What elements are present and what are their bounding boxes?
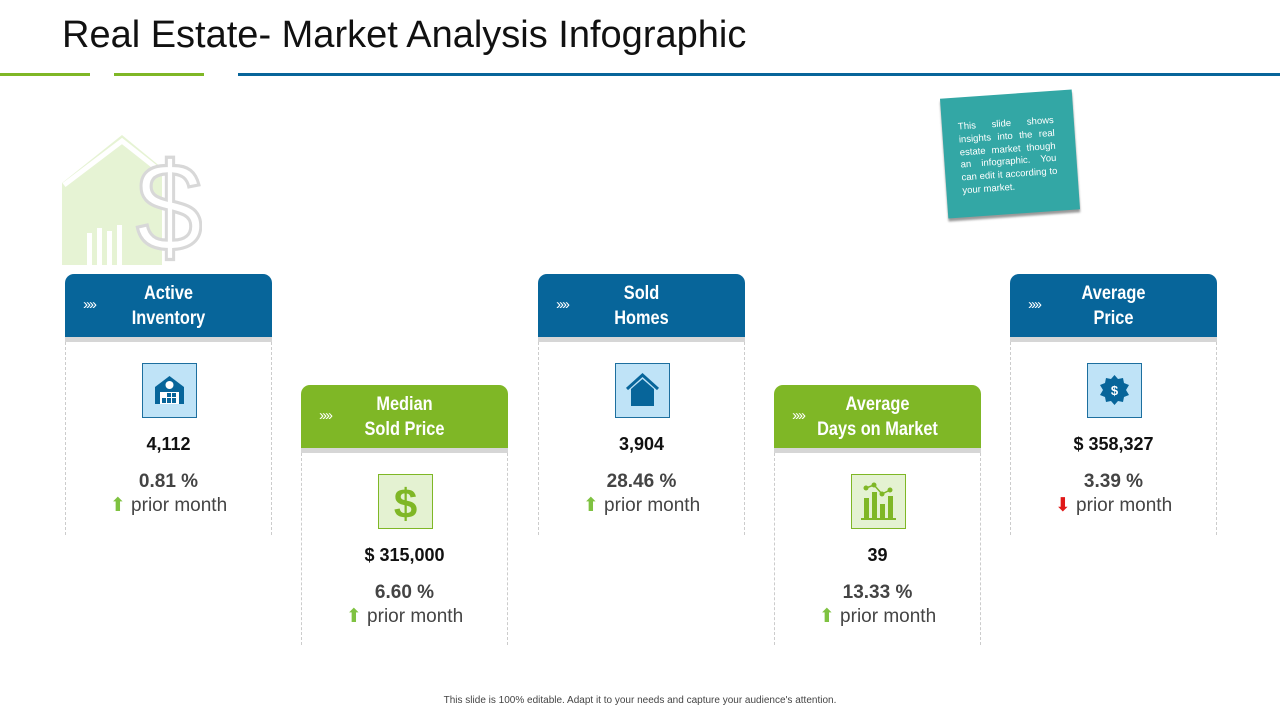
panel: average days on market: Days on Market bbox=[817, 419, 938, 440]
panel: average days on market bbox=[774, 385, 981, 645]
panel: average price: 3.39 % bbox=[1084, 471, 1143, 492]
panel: average price bbox=[1010, 274, 1217, 535]
panel: median sold price: $ 315,000 bbox=[364, 545, 445, 565]
icon: chart bbox=[851, 474, 906, 529]
title: Real Estate- Market Analysis Infographic bbox=[62, 14, 746, 56]
panel: active inventory: Inventory bbox=[132, 308, 205, 329]
panel: average days on market: 13.33 % bbox=[843, 582, 912, 603]
callout note bbox=[940, 90, 1080, 218]
panel: sold homes: 28.46 % bbox=[607, 471, 676, 492]
panel: average days on market: ›››› bbox=[792, 407, 804, 424]
icon: badge dollar bbox=[1087, 363, 1142, 418]
panel: active inventory: ›››› bbox=[83, 296, 95, 313]
panel: active inventory: ⬆ prior month bbox=[110, 495, 227, 516]
icon: badge dollar: $ bbox=[1111, 383, 1119, 398]
icon: house bbox=[615, 363, 670, 418]
panel: sold homes: Homes bbox=[614, 308, 669, 329]
panel: median sold price: 6.60 % bbox=[375, 582, 434, 603]
callout note: This slide shows insights into the real estate market though an infographic. You can edit it according to your market. bbox=[958, 115, 1058, 196]
icon: dollar bbox=[378, 474, 433, 529]
panel: sold homes: ⬆ prior month bbox=[583, 495, 700, 516]
panel: average price: $ 358,327 bbox=[1073, 434, 1154, 454]
panel: average days on market: ⬆ prior month bbox=[819, 606, 936, 627]
panel: average price: Average bbox=[1082, 283, 1145, 304]
panel: sold homes: 3,904 bbox=[619, 434, 664, 454]
panel: median sold price: ⬆ prior month bbox=[346, 606, 463, 627]
panel: median sold price: Sold Price bbox=[365, 419, 444, 440]
icon: dollar: $ bbox=[394, 480, 417, 527]
panel: sold homes: ›››› bbox=[556, 296, 568, 313]
panel: median sold price: Median bbox=[376, 394, 433, 415]
panel: sold homes: Sold bbox=[624, 283, 659, 304]
panel: median sold price: ›››› bbox=[319, 407, 331, 424]
panel: average price: ›››› bbox=[1028, 296, 1040, 313]
icon: warehouse bbox=[142, 363, 197, 418]
panel: sold homes bbox=[538, 274, 745, 535]
panel: average days on market: 39 bbox=[867, 545, 888, 565]
icon: house with dollar bbox=[62, 135, 202, 268]
panel: active inventory: 4,112 bbox=[146, 434, 191, 454]
panel: active inventory bbox=[65, 274, 272, 535]
panel: active inventory: Active bbox=[144, 283, 193, 304]
panel: average price: ⬇ prior month bbox=[1055, 495, 1172, 516]
panel: average days on market: Average bbox=[846, 394, 909, 415]
panel: average price: Price bbox=[1094, 308, 1133, 329]
panel: median sold price bbox=[301, 385, 508, 645]
footer: This slide is 100% editable. Adapt it to your needs and capture your audience's attention. bbox=[444, 695, 836, 706]
panel: active inventory: 0.81 % bbox=[139, 471, 198, 492]
